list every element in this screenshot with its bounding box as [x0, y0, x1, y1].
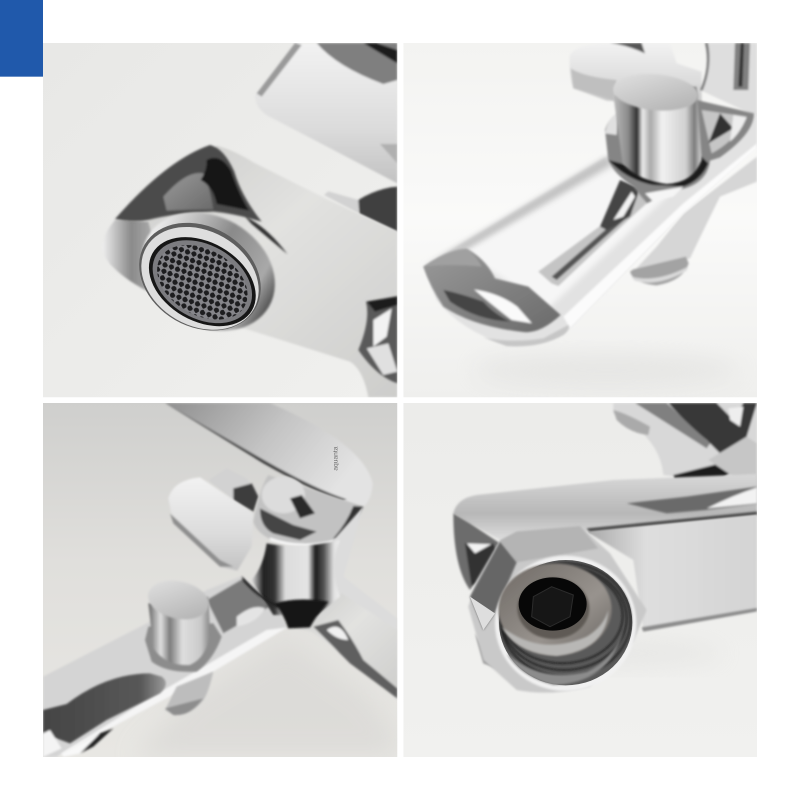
knob top	[144, 575, 212, 625]
spout rim underside	[483, 325, 569, 346]
spout top glow and edge shading	[423, 143, 757, 328]
hex nut	[468, 526, 647, 693]
lower lever reflection	[358, 296, 397, 383]
aerator mesh	[148, 237, 256, 326]
soft floor shadow	[521, 360, 692, 380]
knob base collar	[605, 100, 754, 203]
panel: full mixer photo	[43, 403, 397, 757]
aerator outer ring	[141, 211, 276, 332]
dark pipe reflection	[43, 673, 166, 757]
vertical pipe	[700, 43, 757, 117]
panel background	[403, 403, 757, 757]
spout left end	[453, 513, 500, 590]
panel background	[403, 43, 757, 397]
right body edge	[334, 507, 364, 542]
panel background	[43, 43, 397, 397]
spout top face	[453, 474, 757, 540]
neck	[252, 540, 340, 615]
spout lower lip	[475, 633, 497, 668]
back lever block	[231, 482, 260, 512]
main spout surface	[423, 113, 757, 346]
support cone and threaded nut	[630, 157, 757, 285]
back handle	[570, 43, 702, 107]
spout front lower edge	[642, 608, 757, 632]
rear faucet body	[613, 403, 757, 490]
back lever handle	[168, 477, 253, 571]
knob cylinder	[612, 71, 702, 184]
brand mark on lever: aquanta	[332, 446, 339, 471]
threaded nut under body	[165, 672, 213, 715]
spout front face	[587, 515, 757, 630]
nut top facet	[500, 526, 598, 562]
dark junction	[242, 576, 328, 628]
upper handle	[255, 43, 397, 183]
internal thread	[501, 563, 631, 677]
under-body shadow	[162, 662, 386, 750]
knob body	[144, 575, 212, 665]
spout nose lower left	[106, 220, 152, 292]
cartridge collar	[253, 475, 363, 546]
panel: spout and knob photo	[403, 43, 757, 397]
dark dome reflection	[115, 145, 287, 254]
nut bore rim	[495, 556, 636, 691]
right pipe	[302, 618, 398, 699]
spout body	[148, 146, 398, 398]
front lip reflection	[423, 248, 561, 332]
hex socket	[532, 587, 573, 627]
panel: aerator close-up photo	[43, 43, 397, 397]
washer	[498, 563, 612, 655]
connector floor shadow	[503, 640, 723, 667]
blue corner block	[0, 0, 43, 77]
panel: threaded connector photo	[403, 403, 757, 757]
slot handle arm	[538, 180, 647, 286]
centre bore	[517, 578, 589, 639]
thread highlight	[507, 630, 623, 685]
knob collar	[145, 623, 222, 672]
spout top reflections	[587, 487, 757, 533]
knob top	[613, 76, 698, 112]
left pipe	[43, 576, 287, 757]
lever stub behind spout	[324, 187, 397, 232]
top lever spout	[165, 403, 373, 507]
nut left facet	[470, 542, 517, 630]
panel background	[43, 403, 397, 757]
